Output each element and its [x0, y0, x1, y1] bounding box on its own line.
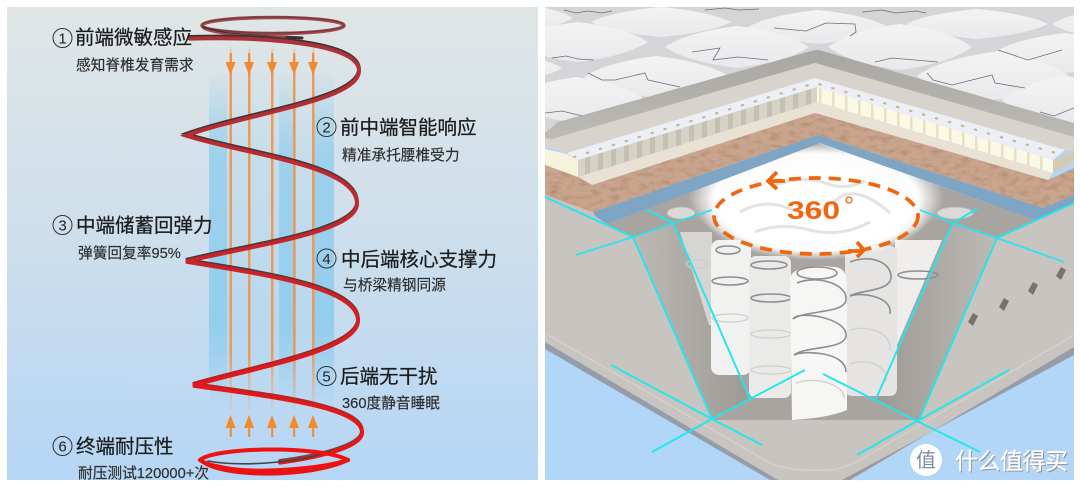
label 5: 后端无干扰	[340, 366, 438, 388]
spring coil	[186, 17, 362, 474]
label 2	[317, 117, 477, 164]
label 5	[317, 366, 440, 412]
label 6: 耐压测试120000+次	[78, 465, 209, 482]
front pocket	[790, 266, 847, 420]
label 4: 4	[322, 251, 331, 268]
cream fibre layer	[578, 102, 1053, 185]
pocket springs	[680, 232, 942, 420]
side handle slots	[968, 267, 1066, 326]
watermark: 什么值得买	[956, 449, 1069, 475]
label 3	[53, 215, 213, 262]
panel: spring diagram	[7, 7, 538, 482]
label 1: 前端微敏感应	[75, 27, 192, 49]
quilted top	[545, 7, 1074, 137]
label 3: 3	[58, 218, 67, 234]
top gray roll border	[545, 50, 1074, 139]
label 4: 中后端核心支撑力	[341, 249, 497, 271]
label 4: 与桥梁精钢同源	[343, 277, 446, 294]
watermark: 什么值得买	[955, 448, 1068, 474]
left pocket	[749, 256, 791, 398]
back pockets	[680, 232, 942, 375]
label 3: 弹簧回复率95%	[78, 244, 181, 262]
label 3: 中端储蓄回弹力	[76, 215, 213, 237]
360 dashed ring	[714, 172, 918, 257]
base board	[545, 190, 1074, 480]
label 5: 360度静音睡眠	[342, 395, 440, 412]
label 6: 6	[58, 438, 67, 456]
latex layer	[545, 78, 1074, 177]
watermark: 值	[916, 449, 936, 472]
label 4	[317, 249, 497, 294]
label 1	[53, 27, 194, 74]
label 5: 5	[322, 368, 331, 386]
bottom arrows pointing up	[226, 415, 318, 437]
label 2: 前中端智能响应	[340, 117, 477, 139]
label 2: 2	[322, 120, 331, 136]
label 1: 感知脊椎发育需求	[76, 57, 194, 74]
blue light bands	[209, 70, 334, 410]
beige border band	[545, 63, 1074, 153]
360 dashed ring: 360	[787, 197, 840, 225]
panel: mattress cutaway	[545, 7, 1074, 480]
blue foam layer	[593, 135, 1074, 224]
coir layer	[545, 113, 1074, 212]
cyan guide lines	[545, 197, 1074, 455]
orange force lines	[230, 45, 314, 410]
watermark	[910, 444, 1069, 476]
top arrows pointing down	[226, 53, 318, 75]
label 1: 1	[58, 30, 67, 48]
right pocket	[845, 246, 897, 396]
label 6	[53, 436, 209, 482]
spring well	[607, 143, 1035, 420]
white spring tops with glow	[667, 142, 973, 260]
label 2: 精准承托腰椎受力	[342, 147, 460, 164]
label 6: 终端耐压性	[76, 436, 174, 458]
